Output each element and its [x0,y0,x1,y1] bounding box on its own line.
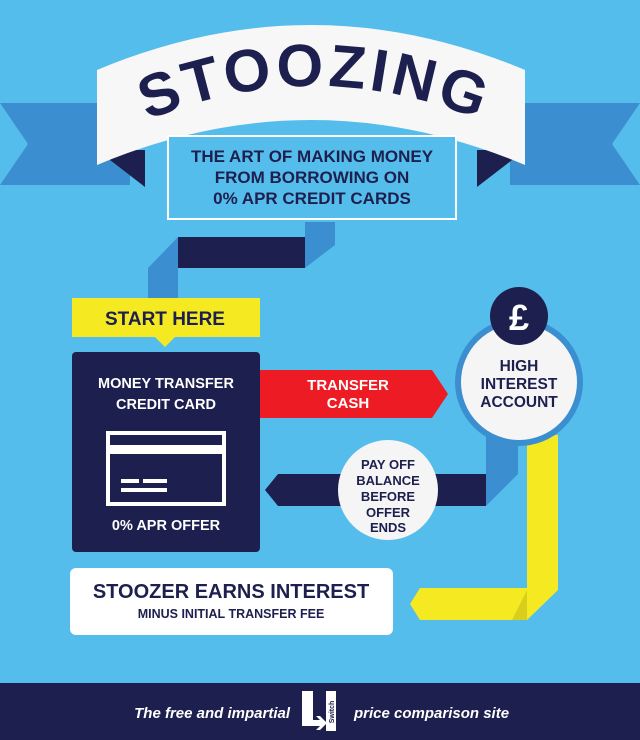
subtitle box: FROM BORROWING ON [215,168,409,187]
footer [0,683,640,740]
pay off circle: OFFER [366,505,411,520]
logo [302,691,336,731]
stoozer earns interest box: STOOZER EARNS INTEREST [93,581,369,603]
pay off circle: BALANCE [356,473,420,488]
high interest account circle: £ [509,297,529,338]
footer: The free and impartial [134,705,291,722]
red arrow: transfer cash: CASH [327,395,369,412]
yellow return path [410,435,558,620]
money transfer credit card panel: 0% APR OFFER [112,518,221,534]
title [135,86,495,126]
subtitle box [168,136,456,219]
high interest account circle: HIGH [500,358,538,375]
stoozer earns interest box: MINUS INITIAL TRANSFER FEE [138,607,324,621]
subtitle box: THE ART OF MAKING MONEY [191,147,434,166]
logo: Switch [329,701,336,723]
ribbon banner: STOOZING [140,44,485,116]
high interest account circle: ACCOUNT [480,394,558,411]
money transfer credit card panel [72,352,260,552]
navy back arrow [265,435,518,506]
subtitle box: 0% APR CREDIT CARDS [213,189,411,208]
high interest account circle: INTEREST [481,376,558,393]
red arrow: transfer cash: TRANSFER [307,377,389,394]
pay off circle [338,440,438,540]
money transfer credit card panel: MONEY TRANSFER [98,376,234,392]
ribbon banner [0,25,640,187]
pay off circle: BEFORE [361,489,415,504]
high interest account circle [458,287,580,443]
red arrow: transfer cash [258,370,448,418]
connector ribbon [148,222,335,300]
pay off circle: ENDS [370,520,406,535]
footer: price comparison site [353,705,509,722]
money transfer credit card panel: CREDIT CARD [116,397,216,413]
pay off circle: PAY OFF [361,457,415,472]
stoozer earns interest box [70,568,393,635]
start here label: START HERE [105,309,225,330]
start here label [72,298,260,347]
